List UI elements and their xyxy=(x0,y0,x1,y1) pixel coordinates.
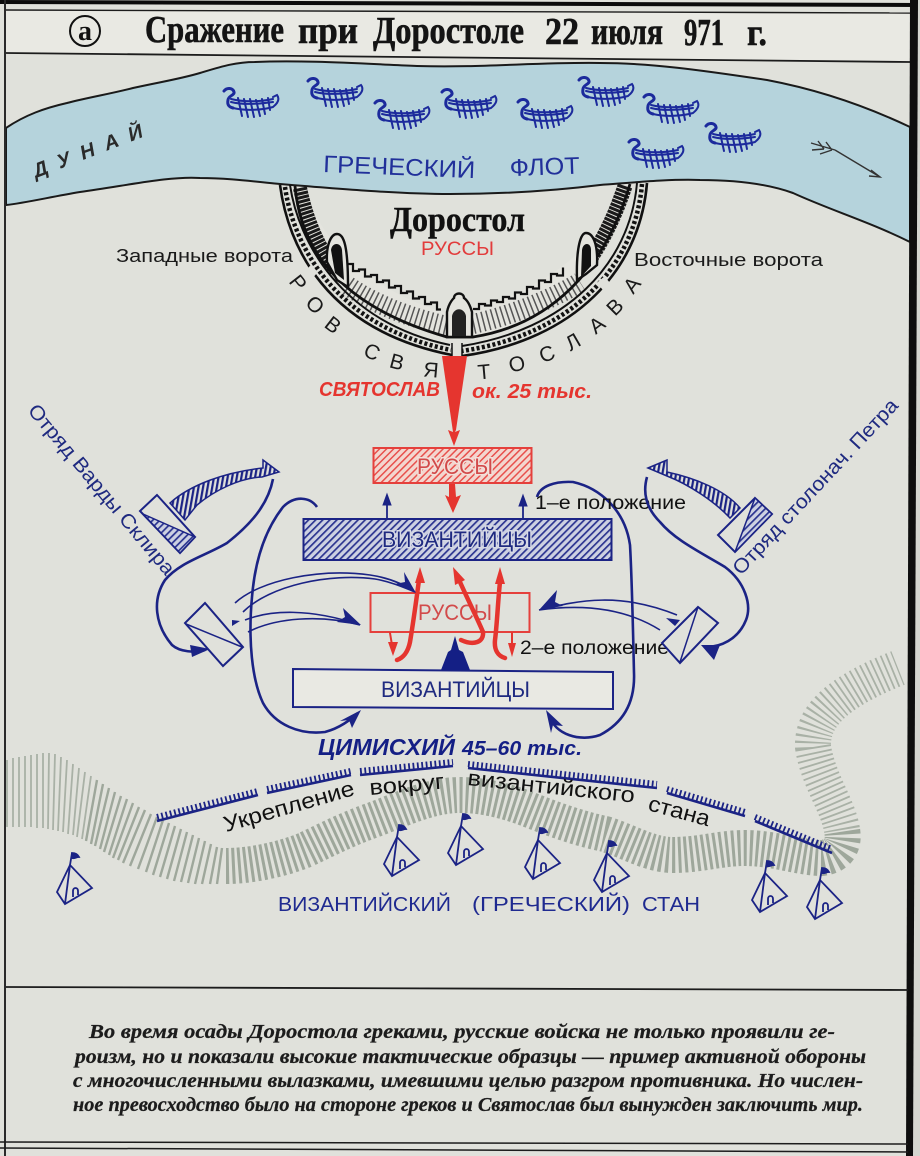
label: Svyatoslav's moat xyxy=(284,271,646,385)
red push arrow xyxy=(445,484,461,513)
title text: июля xyxy=(591,10,663,53)
label: Svyatoslav's moat: А xyxy=(619,273,646,298)
label: Svyatoslav's moat: А xyxy=(585,312,610,339)
small head xyxy=(232,620,240,626)
position 1 label: 1–е положение xyxy=(535,493,686,514)
detachment of Varda Skleros xyxy=(140,460,416,666)
caption text: с многочисленными вылазками, имевшими целью разгром противника. Но числен- xyxy=(73,1070,863,1092)
caption text xyxy=(73,1021,866,1116)
fortification lines xyxy=(157,762,832,853)
greek fleet ships xyxy=(224,77,760,168)
title text: 971 xyxy=(684,11,724,54)
label: Dorostol: Доростол xyxy=(390,200,525,239)
river flow arrow xyxy=(811,141,880,177)
trench band xyxy=(7,668,898,884)
label: Svyatoslav strength: СВЯТОСЛАВ xyxy=(319,379,440,401)
label: fortification: вокруг xyxy=(368,769,445,800)
label: fortification: Укрепление xyxy=(220,776,357,837)
Byzantine camp tents xyxy=(57,814,842,919)
hatched wedge arrow xyxy=(648,460,740,518)
caption text: Во время осады Доростола греками, русские войска не только проявили ге- xyxy=(88,1021,835,1043)
first position: Byzantines: ВИЗАНТИЙЦЫ xyxy=(382,527,532,552)
position 2 label: 2–е положение xyxy=(520,638,669,659)
left flanking curve xyxy=(250,499,358,733)
label: Tzimiskes strength: ЦИМИСХИЙ xyxy=(318,732,455,760)
upper formation xyxy=(140,495,195,553)
right tower xyxy=(577,233,597,280)
label: Svyatoslav's moat: В xyxy=(602,294,628,320)
lower formation xyxy=(662,607,718,663)
title text: г. xyxy=(747,11,767,54)
red wedge arrow from the fortress xyxy=(442,356,467,446)
label: Dunai river: ДУНАЙ xyxy=(27,118,147,183)
label: western gate: Западные ворота xyxy=(116,245,294,266)
sweep curve xyxy=(157,479,273,652)
fortress Dorostol xyxy=(280,183,647,357)
upper formation xyxy=(718,498,772,552)
wall outer line xyxy=(295,184,630,337)
second position: Russians: РУССЫ xyxy=(418,600,492,625)
label: Svyatoslav's moat: Л xyxy=(562,329,585,356)
title text xyxy=(145,8,767,54)
label: Tzimiskes strength xyxy=(318,732,582,760)
label: Svyatoslav's moat: О xyxy=(506,351,528,378)
label: Greek fleet: ФЛОТ xyxy=(509,153,581,182)
moat xyxy=(280,185,452,355)
lower formation xyxy=(185,603,243,666)
title band xyxy=(0,0,920,62)
blue central thrust arrow xyxy=(441,636,470,670)
detachment of Peter the stratopedarch xyxy=(539,460,772,663)
first position: Byzantines xyxy=(304,519,612,560)
caption text: ное превосходство было на стороне греков и Святослав был вынужден заключить мир. xyxy=(73,1094,863,1116)
label: Russes in city: РУССЫ xyxy=(421,239,494,260)
title text: при xyxy=(298,9,358,52)
title text: Сражение xyxy=(145,8,284,51)
second position: Russians xyxy=(370,593,530,632)
river Danube xyxy=(6,61,910,242)
label: Greek fleet: ГРЕЧЕСКИЙ xyxy=(323,150,476,184)
badge a xyxy=(70,16,100,47)
frame lines xyxy=(4,0,6,1156)
label: Greek fleet xyxy=(323,150,581,184)
label: Svyatoslav strength: ок. 25 тыс. xyxy=(472,381,592,403)
red sortie arrows xyxy=(388,567,516,660)
sweep curve xyxy=(645,477,748,647)
caption panel xyxy=(0,987,908,1152)
label: Byzantine camp: ВИЗАНТИЙСКИЙ xyxy=(278,892,451,916)
title text: Доростоле xyxy=(373,9,524,52)
left tower xyxy=(327,234,348,287)
badge a: a xyxy=(78,16,92,47)
label: fortification xyxy=(220,765,714,837)
label: Byzantine camp: СТАН xyxy=(642,893,700,916)
label: Svyatoslav's moat: С xyxy=(536,341,559,368)
title text: 22 xyxy=(545,10,579,53)
label: Svyatoslav's moat: С xyxy=(360,339,384,366)
label: Byzantine camp xyxy=(278,892,700,916)
label: Peter detachment: Отряд столонач. Петра xyxy=(729,394,904,579)
label: Byzantine camp: (ГРЕЧЕСКИЙ) xyxy=(472,892,630,916)
outer margin at right xyxy=(911,0,920,1156)
hatched wedge arrow xyxy=(170,460,279,520)
left arrowhead xyxy=(340,710,361,728)
attack arrow xyxy=(539,600,677,630)
label: Varda Skleros detachment: Отряд Варды Склира xyxy=(23,400,179,580)
wall band xyxy=(295,184,630,337)
lower attack arrow xyxy=(245,612,360,632)
label: Svyatoslav's moat: О xyxy=(301,291,329,319)
first position: Russians: РУССЫ xyxy=(417,454,493,479)
moat gates xyxy=(302,266,318,281)
label: Tzimiskes strength: 45–60 тыс. xyxy=(461,738,582,760)
label: fortification: византийского xyxy=(466,765,636,808)
second position: Byzantines xyxy=(293,669,613,709)
label: Svyatoslav's moat: Р xyxy=(284,271,311,296)
centre tower xyxy=(447,294,472,337)
first position: Russians xyxy=(374,448,532,483)
label: Svyatoslav's moat: Т xyxy=(477,360,492,385)
label: Svyatoslav's moat: В xyxy=(320,312,345,339)
caption text: роизм, но и показали высокие тактические образцы — пример активной обороны xyxy=(73,1046,866,1068)
right black border xyxy=(906,0,918,1156)
label: Svyatoslav's moat: Я xyxy=(422,358,440,383)
label: Svyatoslav's moat: В xyxy=(387,350,407,375)
right flanking curve xyxy=(537,482,634,738)
small blue up arrows xyxy=(383,494,527,518)
label: eastern gate: Восточные ворота xyxy=(634,249,824,270)
label: Svyatoslav strength xyxy=(319,379,592,403)
crenellations xyxy=(347,264,441,310)
label: fortification: стана xyxy=(646,791,714,831)
upper attack arrow xyxy=(235,573,415,612)
right arrowhead xyxy=(546,710,563,733)
second position: Byzantines: ВИЗАНТИЙЦЫ xyxy=(381,677,530,702)
